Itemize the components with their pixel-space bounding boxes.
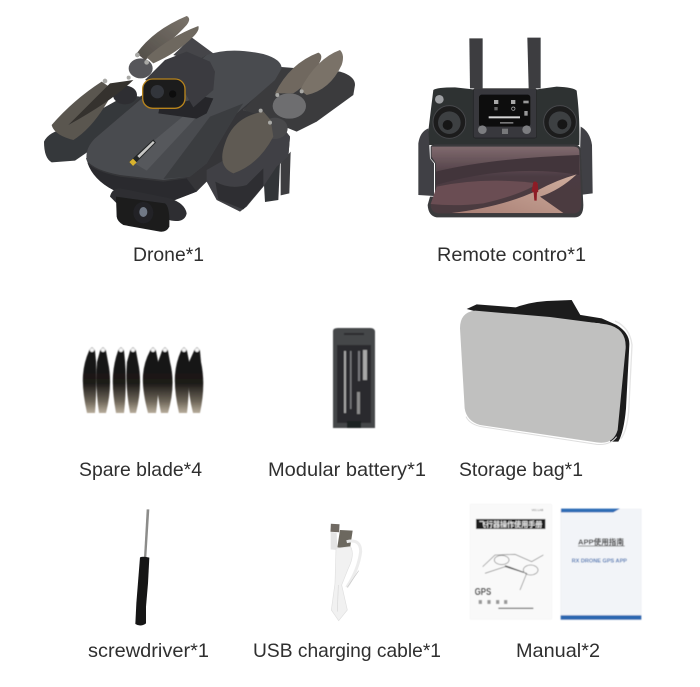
blade pair 3 — [143, 348, 173, 413]
storage bag — [460, 300, 632, 445]
front sensor module — [143, 52, 215, 119]
manual: app guide: RX DRONE GPS APP — [572, 558, 627, 564]
modular battery — [333, 328, 375, 428]
blade pair 2 — [113, 348, 140, 413]
controller body — [427, 87, 579, 145]
label: spare blades: Spare blade*4 — [79, 459, 202, 481]
main body — [86, 51, 282, 180]
manual: app guide: APP使用指南 — [578, 536, 624, 546]
screwdriver — [135, 509, 149, 626]
USB charging cable — [330, 524, 361, 621]
manual: flight operation — [470, 504, 552, 619]
remote controller — [418, 38, 593, 217]
phone with desert photo — [428, 144, 583, 217]
landing legs — [263, 163, 280, 202]
manual: flight operation: V01.LAB — [531, 508, 543, 512]
label: storage bag: Storage bag*1 — [459, 459, 583, 481]
hub screws — [103, 53, 304, 125]
spare blades — [83, 348, 203, 413]
manual: app guide — [561, 509, 641, 620]
blade pair 1 — [83, 348, 110, 413]
label: manual: Manual*2 — [516, 640, 600, 662]
manual: flight operation: 飞行器操作使用手册 — [479, 520, 543, 529]
label: USB charging cable: USB charging cable*1 — [253, 640, 441, 662]
manual: flight operation: GPS — [475, 587, 492, 598]
drone — [44, 16, 355, 232]
joysticks — [433, 106, 576, 138]
propellers — [137, 16, 189, 60]
display screen — [479, 95, 530, 127]
bag front panel — [460, 311, 626, 443]
label: drone: Drone*1 — [133, 244, 204, 266]
front right arm — [207, 122, 290, 212]
label: remote control: Remote contro*1 — [437, 244, 586, 266]
rotor hubs — [129, 58, 153, 78]
phone clamps — [418, 128, 434, 196]
body base silhouette — [86, 55, 290, 212]
zipper and side — [467, 304, 629, 442]
figure in red — [532, 182, 538, 201]
rear arms — [173, 37, 213, 63]
gimbal camera — [110, 188, 187, 232]
label: modular battery: Modular battery*1 — [268, 459, 426, 481]
logo — [129, 139, 156, 166]
antennas — [469, 38, 483, 88]
manuals — [470, 504, 641, 620]
strap — [512, 300, 581, 316]
label: screwdriver: screwdriver*1 — [88, 640, 209, 662]
blade pair 4 — [175, 348, 203, 413]
